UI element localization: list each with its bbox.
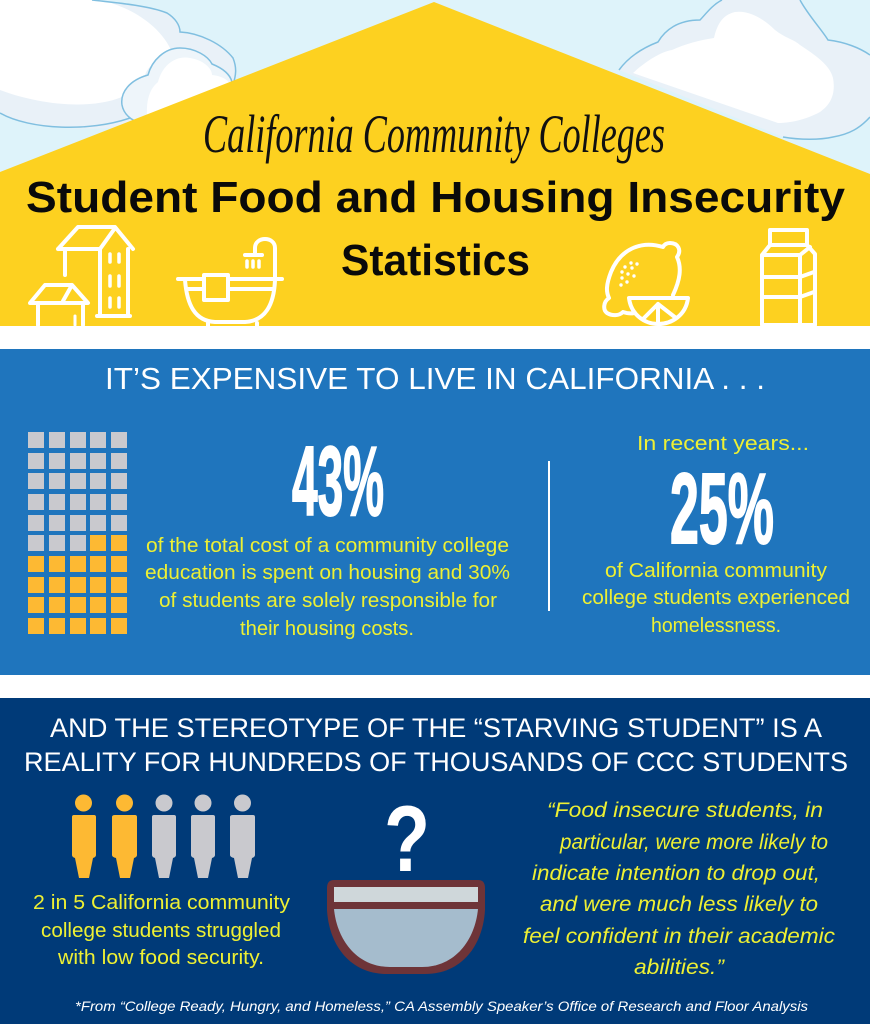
heading: expensive: IT’S EXPENSIVE TO LIVE IN CALIFORNIA . . . — [105, 361, 765, 396]
icon: empty bowl — [327, 880, 485, 974]
icon: five people — [72, 794, 255, 878]
main title: Statistics — [341, 236, 530, 285]
section: expensive — [0, 349, 870, 675]
text: housing cost: their housing costs. — [240, 618, 414, 640]
text: 43% — [292, 426, 384, 536]
main title: Student Food and Housing Insecurity — [26, 173, 846, 222]
quote: “Food insecure students, in — [547, 799, 823, 822]
quote: indicate intention to drop out, — [532, 862, 820, 885]
left cloud outline — [0, 0, 236, 127]
icon: question mark: ? — [384, 786, 430, 891]
quote: feel confident in their academic — [523, 925, 836, 948]
roof banner — [0, 2, 870, 326]
icon: bathtub — [178, 239, 282, 326]
right cloud outline — [619, 0, 870, 139]
heading: starving student: AND THE STEREOTYPE OF THE “STARVING STUDENT” IS A — [50, 713, 822, 743]
header: sky and clouds — [0, 0, 870, 326]
quote: and were much less likely to — [540, 893, 818, 916]
quote: particular, were more likely to — [559, 831, 828, 854]
text: 2 in 5: college students struggled — [41, 920, 281, 942]
text: homelessness: homelessness. — [651, 615, 781, 637]
small cloud — [122, 48, 232, 125]
small cloud highlight — [147, 58, 230, 125]
icon: milk carton — [762, 230, 815, 325]
right cloud back — [619, 0, 870, 139]
text: 2 in 5: 2 in 5 California community — [33, 892, 290, 914]
text: housing cost: of students are solely responsible for — [159, 590, 497, 612]
heading: starving student — [24, 713, 848, 777]
left cloud front — [0, 0, 170, 104]
text: homelessness: college students experienced — [582, 587, 850, 609]
heading: starving student: REALITY FOR HUNDREDS OF THOUSANDS OF CCC STUDENTS — [24, 747, 848, 777]
left cloud back — [0, 0, 236, 129]
chart: 100 square waffle — [28, 432, 127, 634]
text: housing cost — [145, 535, 510, 640]
text: 2 in 5 — [33, 892, 290, 969]
quote: abilities.” — [634, 956, 725, 979]
text: housing cost: education is spent on housing and 30% — [145, 562, 510, 584]
text: homelessness: of California community — [605, 560, 827, 582]
text: in recent years: In recent years... — [637, 433, 809, 455]
text: 2 in 5: with low food security. — [57, 947, 264, 969]
icon: houses — [30, 227, 133, 325]
main title — [26, 173, 846, 285]
text: homelessness — [582, 560, 850, 637]
footnote: *From “College Ready, Hungry, and Homeless,” CA Assembly Speaker’s Office of Research and Floor Analysis — [75, 998, 808, 1014]
icon: lemon — [604, 243, 688, 324]
text: housing cost: of the total cost of a community college — [146, 535, 509, 557]
section: starving student — [0, 698, 870, 1024]
right cloud front — [633, 12, 834, 123]
quote — [523, 799, 836, 979]
stat: 25%: 25% — [670, 453, 774, 565]
